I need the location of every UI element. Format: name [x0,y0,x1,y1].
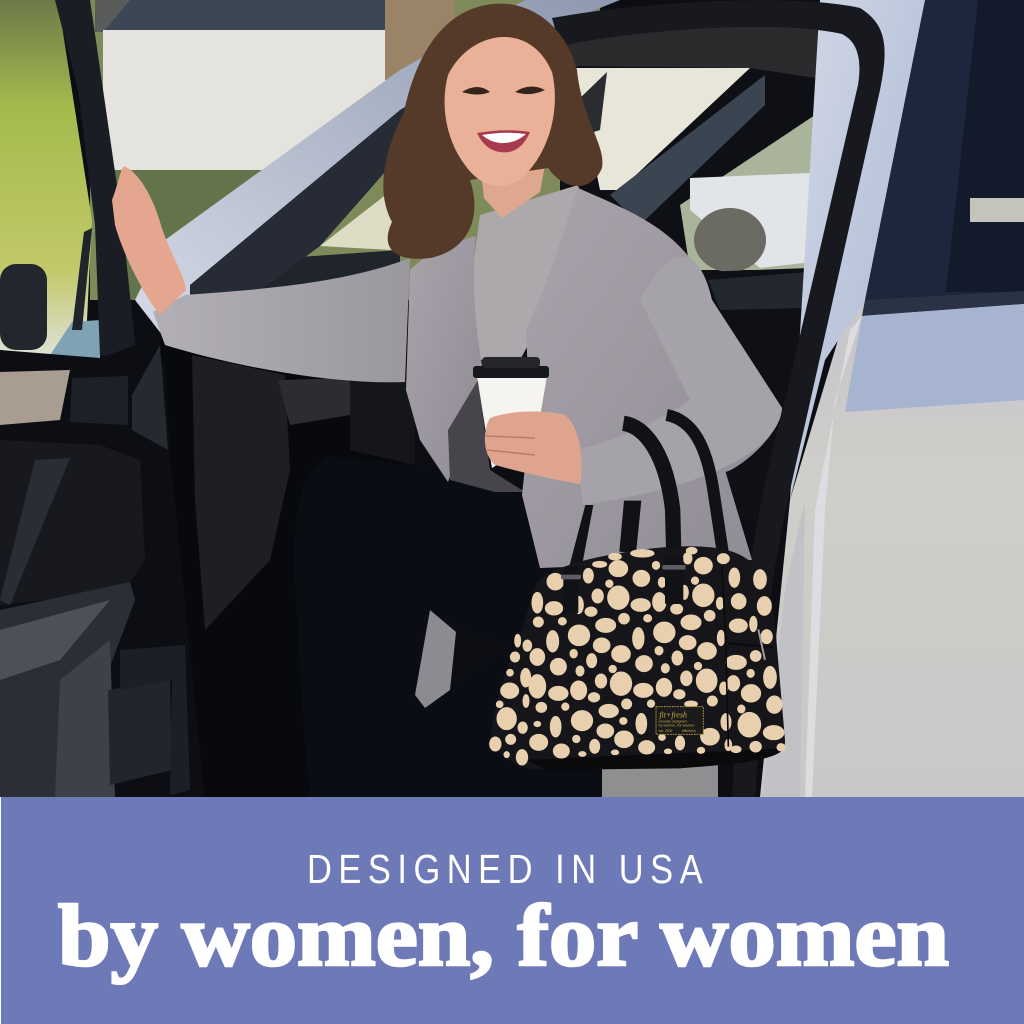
front door frame [55,0,136,356]
windshield and cabin glimpse [240,190,400,370]
car side window, front door [0,0,100,360]
bag body [490,546,785,769]
bag spots [490,548,785,765]
woman's hair [383,4,602,259]
woman's neck [480,165,545,218]
bag straps [563,415,723,613]
banner [0,797,1024,1024]
scene base [0,0,1024,797]
open door interior panel [160,340,415,797]
cabin interior [555,22,870,520]
woman's turtleneck [470,185,590,360]
right side car body [760,0,1024,797]
woman's face [445,37,555,186]
strap buckles [561,565,686,579]
bag dark base [527,748,785,770]
raised hand [112,166,186,315]
front door lower interior [0,340,205,797]
hand holding cup [485,412,582,484]
handbag [490,415,785,770]
bag label: est. 2005 [659,729,673,733]
woman's pants [294,456,605,797]
bag label: proudly designed [659,719,687,723]
bag label: fit+fresh [659,710,687,719]
car roof and A-pillar [135,0,620,345]
raised arm sleeve [153,258,410,382]
zipper pull [758,629,765,660]
outdoor background [90,0,600,300]
bag label: by women, for women [659,724,694,728]
grey coat hem below bag [602,765,718,797]
coffee cup [473,357,549,468]
headline: by women, for women [58,888,949,985]
door opening frame [552,0,885,797]
bag pocket zipper [728,643,773,647]
subheading: DESIGNED IN USA [307,847,703,893]
woman's cardigan [406,188,782,568]
bag label [656,707,703,734]
bag front panel seam [722,567,728,747]
strap connectors [563,557,683,613]
bag label: #fitnfresh [682,729,696,733]
photo: woman stepping out of a car [0,0,1024,797]
